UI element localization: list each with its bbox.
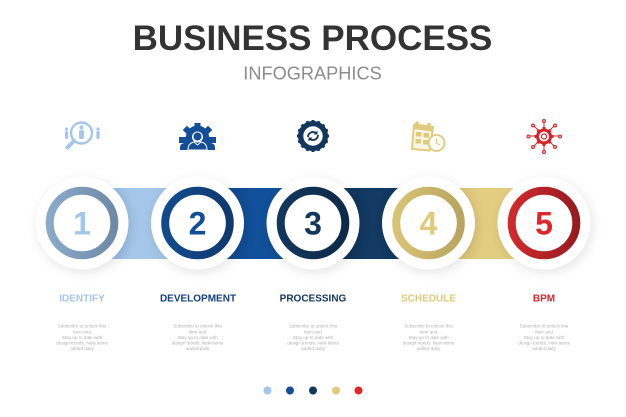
text block 3 [287, 324, 339, 351]
step 2 circle [151, 176, 244, 270]
text block 3: added daily [301, 346, 325, 351]
step 5 circle: 5 [535, 206, 553, 242]
text block 4: Stay up to date with [408, 335, 449, 340]
text block 4: design trends. New items [403, 340, 455, 346]
step 4 circle: 4 [420, 206, 438, 242]
circle shadows [38, 180, 592, 272]
step 4 circle [382, 176, 475, 270]
text block 2: item and [189, 329, 207, 334]
text block 5: Stay up to date with [524, 335, 565, 340]
step 3 circle: 3 [304, 206, 322, 242]
text block 1: item and [73, 329, 91, 334]
text block 5: Subscribe to unlock this [520, 324, 569, 329]
text block 4 [403, 324, 455, 351]
text block 4: item and [420, 329, 438, 334]
text block 5: design trends. New items [518, 340, 570, 346]
step 2 circle: 2 [189, 206, 206, 242]
text block 2: design trends. New items [172, 340, 224, 346]
text block 3: design trends. New items [287, 340, 339, 346]
label: development: DEVELOPMENT [160, 294, 236, 305]
pagination dots [264, 386, 362, 394]
text block 1: design trends. New items [56, 340, 108, 346]
subtitle: INFOGRAPHICS [243, 64, 382, 84]
text block 5: item and [535, 329, 553, 334]
icon: calendar and clock [412, 121, 444, 151]
text block 2 [172, 324, 224, 351]
step 1 circle: 1 [73, 206, 91, 242]
text block 3: Stay up to date with [293, 335, 334, 340]
text block 2: Subscribe to unlock this [173, 324, 222, 329]
icon: gear with refresh arrows [297, 120, 329, 152]
label: bpm: BPM [533, 294, 555, 305]
step 5 circle [498, 176, 590, 270]
label: processing: PROCESSING [280, 294, 347, 305]
text block 1: added daily [70, 346, 94, 351]
text block 1: Subscribe to unlock this [58, 324, 107, 329]
text block 4: added daily [417, 346, 441, 351]
label: schedule: SCHEDULE [401, 294, 456, 305]
text block 4: Subscribe to unlock this [404, 324, 453, 329]
icon: red network gear [527, 120, 562, 154]
text block 1 [56, 324, 108, 351]
text block 3: Subscribe to unlock this [289, 324, 338, 329]
icon: magnifier with people [65, 122, 100, 148]
label: identify: IDENTIFY [59, 294, 105, 305]
text block 1: Stay up to date with [62, 335, 103, 340]
step 1 circle [36, 176, 128, 270]
text block 3: item and [304, 329, 322, 334]
title: BUSINESS PROCESS [133, 19, 492, 58]
text block 5 [518, 324, 570, 351]
text block 2: Stay up to date with [177, 335, 218, 340]
icon: team gear [179, 123, 216, 150]
text block 2: added daily [186, 346, 210, 351]
step 3 circle [266, 176, 360, 270]
connector bands [82, 188, 544, 259]
text block 5: added daily [532, 346, 556, 351]
